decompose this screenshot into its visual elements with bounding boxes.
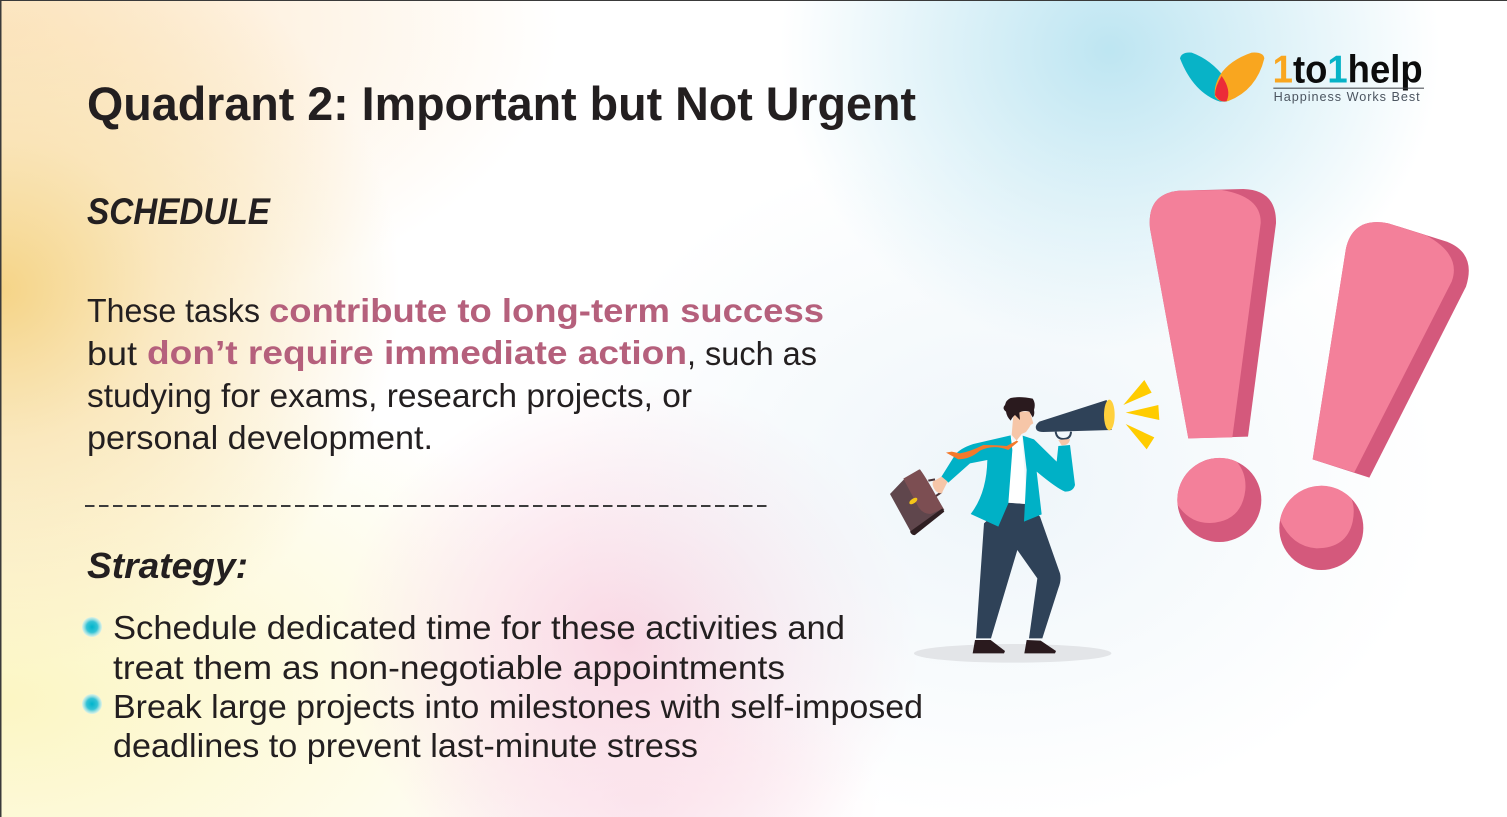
shirt [1008, 436, 1027, 504]
text block: description: don’t require immediate action [147, 334, 687, 371]
jacket [941, 435, 1075, 527]
hair [1004, 397, 1035, 421]
left hand [933, 477, 948, 493]
text block: description: These tasks [87, 292, 260, 329]
icon: exclamation marks [1150, 189, 1469, 570]
bullet 2 [82, 694, 102, 714]
head [1012, 412, 1033, 441]
bullet 1 text: Schedule dedicated time for these activities and [113, 609, 845, 646]
bullet 1 text: treat them as non-negotiable appointments [113, 649, 785, 686]
text block: description: but [87, 335, 137, 372]
logo: 1to1help [1180, 48, 1424, 104]
shoes [973, 640, 1056, 653]
tie [946, 441, 1018, 459]
briefcase [890, 469, 944, 535]
bullet 2 text: deadlines to prevent last-minute stress [113, 727, 698, 764]
bullet 1 [82, 617, 102, 637]
subheading: schedule: SCHEDULE [87, 191, 271, 232]
text block: description [87, 292, 824, 456]
list: strategy bullets [82, 609, 923, 764]
text block: description: , such as [687, 335, 817, 372]
sound rays [1123, 380, 1159, 449]
text block: description: studying for exams, research projects, or [87, 377, 692, 414]
right exclamation mark [1279, 222, 1469, 570]
left exclamation mark [1150, 189, 1276, 542]
megaphone [1036, 400, 1115, 445]
ground shadow [914, 644, 1111, 663]
logo tagline: Happiness Works Best [1274, 90, 1420, 104]
text block: description: contribute to long-term success [269, 292, 824, 329]
trousers [976, 503, 1061, 638]
subheading: strategy: Strategy: [87, 545, 248, 586]
bullet 2 text [113, 688, 923, 764]
bullet 1 text [113, 609, 845, 686]
logo mark [1180, 53, 1264, 102]
bullet 2 text: Break large projects into milestones with self-imposed [113, 688, 923, 725]
illustration: man with megaphone and briefcase [890, 380, 1159, 663]
title: Quadrant 2: Important but Not Urgent [87, 77, 916, 130]
logo wordmark: 1to1help [1273, 48, 1423, 92]
text block: description: personal development. [87, 419, 433, 456]
